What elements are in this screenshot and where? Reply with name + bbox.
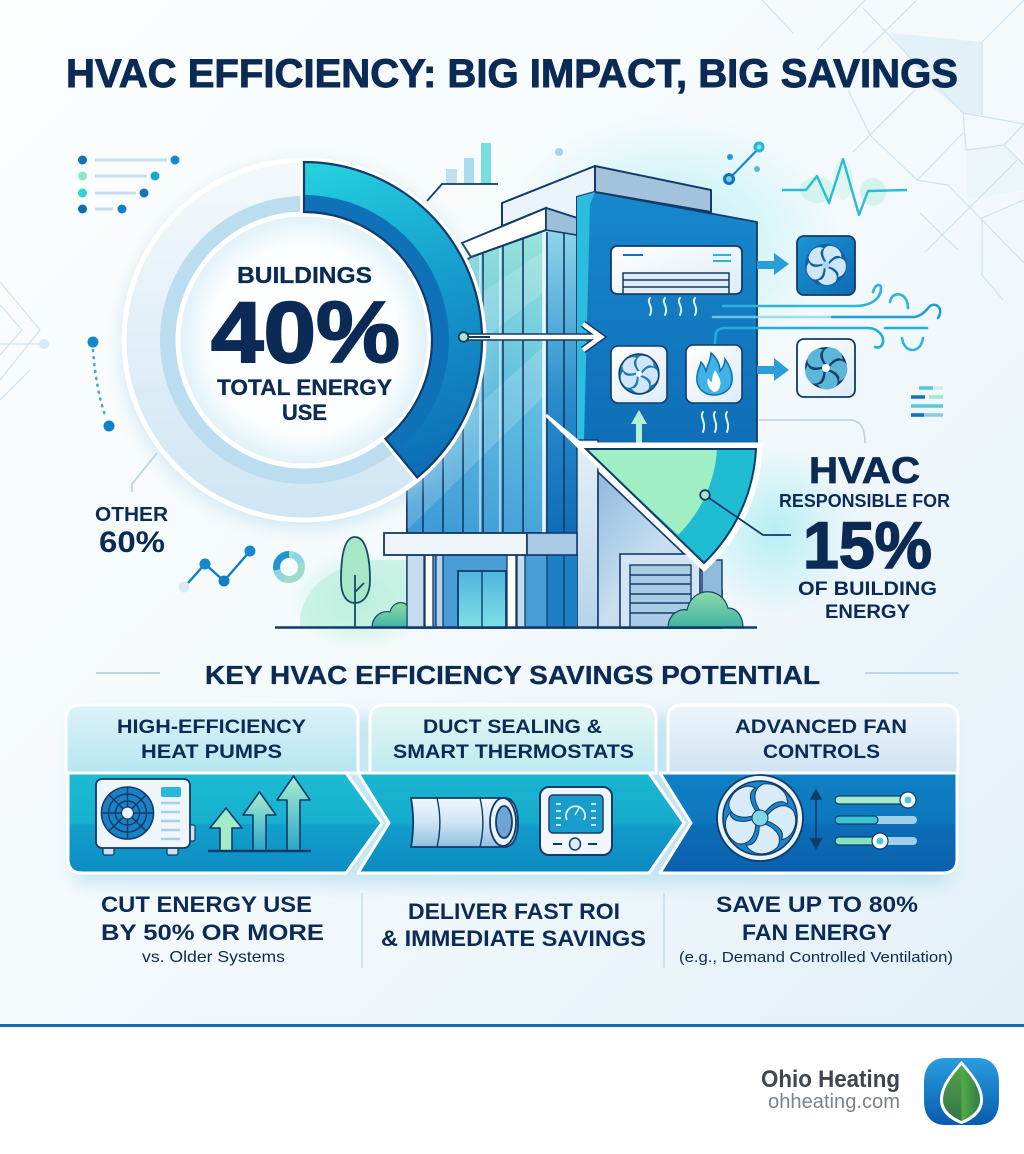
- text: heat pump savings: vs. Older Systems: [142, 949, 285, 966]
- label: HVAC 15 percent: HVAC: [809, 450, 920, 491]
- label: other 60 percent: 60%: [99, 526, 165, 559]
- background glows: [290, 115, 855, 650]
- text: duct and thermostat savings: [381, 899, 646, 951]
- panel: duct sealing and smart thermostats: [358, 705, 684, 873]
- text: heat pump savings: [101, 892, 324, 966]
- label: HVAC 15 percent: [779, 450, 950, 623]
- donut label: USE: [282, 400, 327, 425]
- donut label: 40%: [211, 285, 400, 381]
- icon: duct: [411, 798, 518, 847]
- footer brand text: Ohio Heating: [761, 1066, 900, 1093]
- label: HVAC 15 percent: RESPONSIBLE FOR: [779, 491, 950, 511]
- label: HVAC 15 percent: ENERGY: [825, 601, 910, 623]
- text: heat pump savings: BY 50% OR MORE: [101, 920, 324, 945]
- card title: ADVANCED FAN: [735, 716, 907, 738]
- footer brand text: ohheating.com: [768, 1091, 900, 1113]
- icon: air waves: [649, 298, 696, 315]
- donut label: BUILDINGS: [237, 262, 372, 288]
- title: HVAC EFFICIENCY: BIG IMPACT, BIG SAVINGS: [66, 52, 958, 96]
- leader: wedge to label: [709, 498, 791, 535]
- icon: dark fan tile: [797, 236, 855, 295]
- arrow: to fan tile 1: [757, 253, 789, 275]
- footer band: [0, 1024, 1024, 1154]
- donut label: TOTAL ENERGY: [217, 375, 392, 400]
- green blob: [300, 560, 420, 628]
- icon: network nodes: [555, 143, 763, 184]
- icon: large fan: [717, 775, 803, 862]
- card title: CONTROLS: [763, 741, 880, 763]
- icon: small bar chart: [427, 143, 498, 201]
- awning: [384, 533, 527, 555]
- icon: control sliders: [835, 792, 917, 849]
- icon: list decoration: [78, 156, 180, 214]
- illustration: building: [300, 166, 757, 628]
- label: HVAC 15 percent: OF BUILDING: [798, 578, 937, 600]
- chart: buildings energy donut: [120, 160, 488, 529]
- icon: flame tile: [686, 345, 742, 403]
- garage: [620, 554, 700, 628]
- tower body: [577, 192, 757, 450]
- footer brand text: [761, 1066, 900, 1113]
- icon: pulse line: [782, 159, 907, 215]
- text: duct and thermostat savings: DELIVER FAST ROI: [408, 899, 620, 924]
- panel: advanced fan controls: [660, 705, 958, 873]
- card title: SMART THERMOSTATS: [393, 741, 634, 763]
- icon: heat waves: [702, 412, 728, 432]
- donut label: [211, 262, 400, 425]
- card title: [117, 716, 306, 763]
- icon: small legend bars: [911, 388, 943, 415]
- text: fan control savings: FAN ENERGY: [742, 920, 892, 945]
- entrance area: [407, 555, 577, 628]
- glass facade: [407, 220, 577, 533]
- card title: HIGH-EFFICIENCY: [117, 716, 306, 738]
- label: HVAC 15 percent: 15%: [803, 508, 932, 582]
- icon: rising arrows: [208, 776, 311, 851]
- lower wall: [577, 440, 598, 628]
- icon: dotted connector: [88, 336, 114, 432]
- card title: DUCT SEALING &: [423, 716, 602, 738]
- heading: savings potential: KEY HVAC EFFICIENCY SAVINGS POTENTIAL: [205, 660, 820, 690]
- icon: mini donut: [276, 554, 302, 580]
- label: other 60 percent: OTHER: [95, 504, 169, 526]
- panel: high-efficiency heat pumps: [66, 705, 382, 873]
- icon: vertical arrow: [811, 790, 821, 848]
- text: fan control savings: [679, 892, 953, 966]
- text: fan control savings: (e.g., Demand Controlled Ventilation): [679, 949, 953, 966]
- arrow: to fan tile 2: [757, 358, 789, 381]
- card title: HEAT PUMPS: [141, 741, 282, 763]
- buildings 40 percent segment: [304, 162, 482, 477]
- icon: fan tile inside tower: [611, 346, 667, 403]
- arrow: 40 percent to building: [459, 324, 601, 350]
- roof upper box: [502, 166, 595, 226]
- icon: tree and shrubs: [275, 537, 757, 628]
- icon: airflow lines: [713, 285, 940, 350]
- text: heat pump savings: CUT ENERGY USE: [101, 892, 312, 917]
- icon: line chart: [178, 546, 256, 592]
- icon: heat pump unit: [96, 779, 195, 855]
- text: duct and thermostat savings: & IMMEDIATE SAVINGS: [381, 926, 646, 951]
- label: other 60 percent: [95, 453, 169, 559]
- text: fan control savings: SAVE UP TO 80%: [716, 892, 918, 917]
- icon: smart thermostat: [540, 787, 612, 855]
- chart: HVAC 15 percent wedge: [546, 415, 761, 570]
- card title: [393, 716, 634, 763]
- icon: light fan tile: [797, 339, 855, 397]
- arrow: up from wedge: [631, 410, 647, 443]
- icon: wall air conditioner: [611, 246, 742, 294]
- card title: [735, 716, 907, 763]
- icon: logo: [924, 1058, 999, 1125]
